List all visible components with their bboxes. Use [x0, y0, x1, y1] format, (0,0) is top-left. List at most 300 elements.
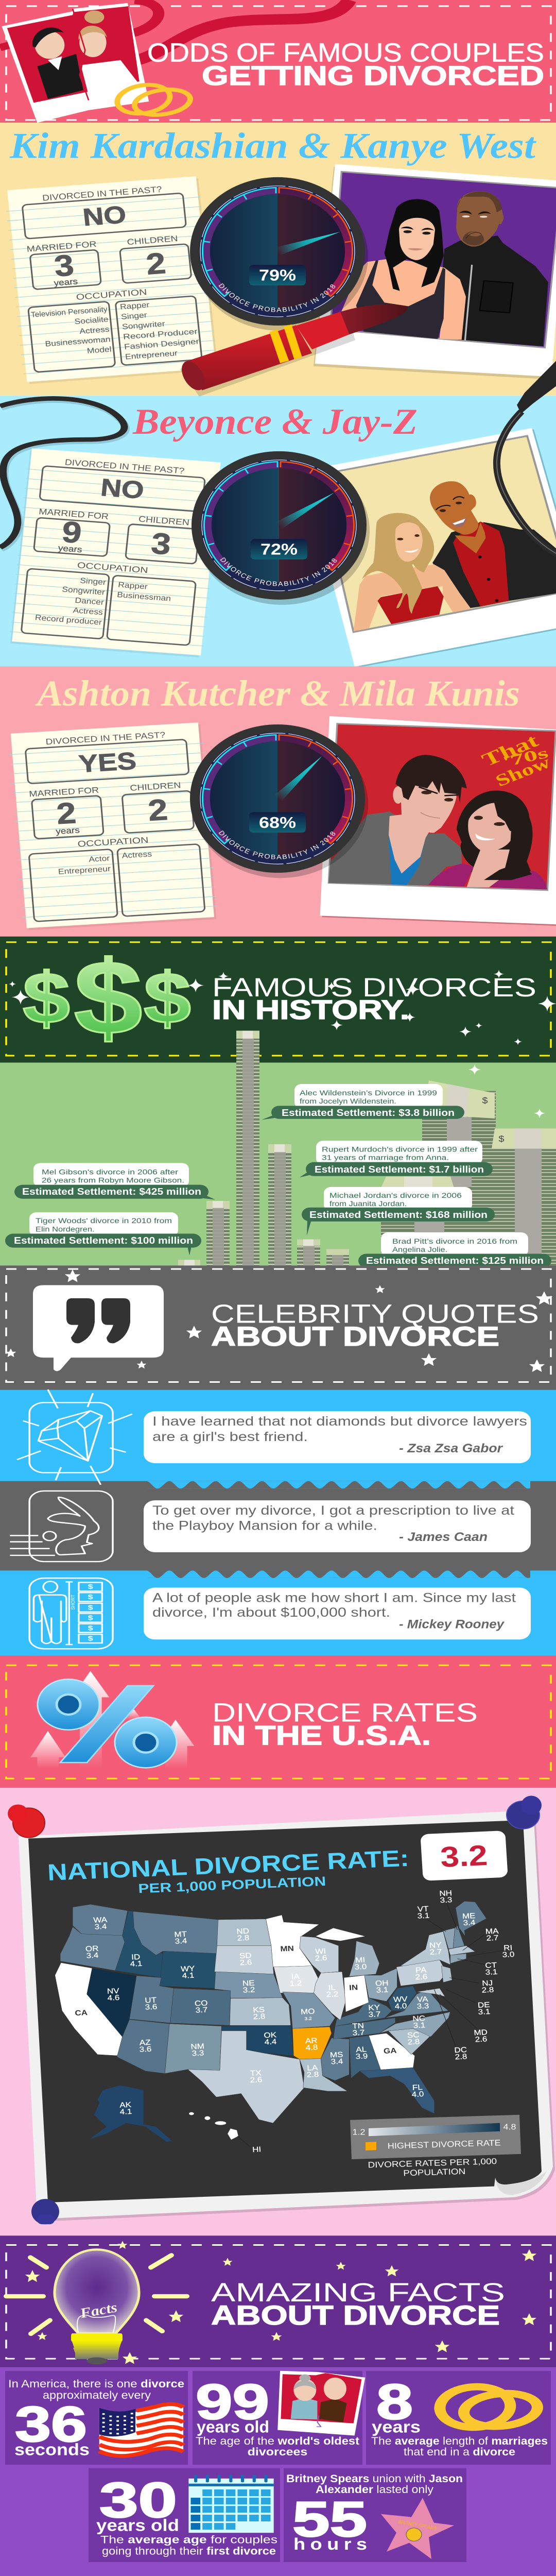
labels: state rates: 3.6: [139, 2045, 152, 2054]
bar: Michael Jordan tower: [297, 1240, 320, 1265]
labels: state rates: 2.6: [239, 1958, 252, 1967]
labels: state rates: AR: [305, 2037, 318, 2045]
callout: Brad Pitt: Angelina Jolie.: [392, 1246, 447, 1254]
labels: state rates: 3.4: [86, 1952, 99, 1960]
labels: state rates: NY: [429, 1941, 442, 1950]
fact panel: 36 seconds: 36: [15, 2396, 87, 2452]
list: Kanye occupations: Entrepreneur: [125, 349, 178, 361]
fact panel: 99 years old: years old: [197, 2418, 269, 2436]
list: Jay-Z occupations: Rapper: [118, 581, 148, 591]
bar: Michael Jordan big stack: [381, 1177, 493, 1265]
labels: state rates: PA: [415, 1966, 427, 1975]
labels: state rates: KS: [253, 2006, 265, 2014]
icon: gold rings: [432, 2382, 542, 2432]
labels: state rates: 3.1: [478, 2008, 491, 2016]
labels: state rates: 2.7: [429, 1948, 442, 1957]
label: divorced in the past: DIVORCED IN THE PAST?: [45, 730, 166, 747]
icon: stethoscope cable: [0, 398, 126, 549]
icon: bulb rays: [6, 2255, 187, 2334]
fact panel: 30 years old: The average age for couples: [100, 2533, 277, 2546]
section background: quote row grey: [0, 1481, 556, 1570]
section background: famous divorces header: [0, 937, 556, 1063]
paper: Kim and Kanye facts: [4, 176, 218, 384]
callout: Michael Jordan: [302, 1187, 495, 1235]
bar: Tiger Woods tower: [178, 1260, 200, 1265]
map: United States by divorce rate: [55, 1889, 515, 2154]
labels: state rates: 4.1: [130, 1960, 143, 1968]
icon: Hollywood star: BRITNEY SPEARS: [397, 2519, 437, 2532]
icon: dollar signs: $: [23, 958, 70, 1039]
subheading: per 1,000 population: PER 1,000 POPULATION: [138, 1874, 326, 1896]
bar: Rupert Murdoch tower: [268, 1144, 291, 1265]
fact panel: 30 years old: years old: [96, 2516, 179, 2535]
label: occupation: OCCUPATION: [77, 561, 148, 575]
title: ABOUT DIVORCE: [211, 1322, 499, 1352]
legend: HIGHEST DIVORCE RATE: [387, 2138, 501, 2150]
photo: Beyonce and Jay-Z polaroid: [303, 428, 556, 668]
labels: state rates: SD: [239, 1952, 252, 1960]
labels: state rates: 2.8: [306, 2071, 319, 2079]
callout: Rupert Murdoch: 31 years of marriage from Anna.: [322, 1154, 449, 1162]
value: 2 children: 2: [145, 247, 167, 281]
labels: state rates: 3.2: [304, 2016, 312, 2021]
icon: dollar signs: $: [144, 958, 191, 1039]
labels: state rates: 3.1: [485, 1968, 498, 1977]
label: occupation: OCCUPATION: [77, 835, 149, 849]
header panel: amazing facts: [6, 2241, 551, 2364]
labels: state rates: 3.9: [355, 2052, 368, 2061]
list: Kim occupations: Model: [86, 345, 112, 355]
labels: state rates: IL: [328, 1984, 336, 1992]
callout: Mel Gibson: 26 years from Robyn Moore Gibson.: [42, 1177, 184, 1184]
label: occupation: OCCUPATION: [76, 287, 147, 302]
fact panel: 55 hours: hours: [293, 2535, 367, 2553]
labels: state rates: 2.8: [407, 2038, 420, 2046]
labels: state rates: 3.4: [175, 1937, 187, 1945]
value: 9 years: 9: [60, 515, 83, 550]
icon: ribbon: [0, 0, 349, 62]
callout: Brad Pitt: Estimated Settlement: $125 million: [366, 1256, 544, 1266]
legend: POPULATION: [403, 2166, 466, 2178]
label: children: CHILDREN: [127, 233, 178, 247]
callout: Tiger Woods: Elin Nordegren.: [36, 1225, 95, 1233]
labels: state rates: [75, 1889, 515, 2154]
labels: state rates: NJ: [482, 1979, 493, 1988]
fact panel: 36 seconds: In America, there is one divorce: [8, 2378, 184, 2390]
gauge: 72 percent: 72%: [260, 541, 298, 558]
icon: red pin: [8, 1804, 45, 1838]
list: Kanye occupations: Fashion Designer: [124, 337, 200, 351]
quote card: James Caan: the Playboy Mansion for a while.: [152, 1518, 377, 1533]
bar: Mel Gibson tower: [206, 1201, 230, 1265]
callout: Rupert Murdoch: [300, 1141, 493, 1177]
value: 3 years: 3: [53, 249, 76, 283]
labels: state rates: IA: [291, 1973, 300, 1981]
icon: torn wedding photo: [2, 3, 149, 123]
legend: DIVORCE RATES PER 1,000: [368, 2156, 497, 2170]
text: That '70s Show logo: Show: [492, 753, 554, 790]
labels: state rates: 3.4: [94, 1923, 107, 1931]
section background: header pink: [0, 0, 556, 123]
gauge: 72 percent: [192, 451, 370, 605]
bar: Rupert Murdoch big stack: $: [498, 1133, 505, 1143]
quote card: James Caan: - James Caan: [399, 1531, 488, 1544]
labels: state rates: 4.0: [394, 2002, 407, 2011]
title: [212, 1698, 478, 1751]
section background: divorce rates header: [0, 1656, 556, 1788]
labels: state rates: 3.7: [352, 2029, 365, 2037]
text: That '70s Show logo: [478, 731, 554, 790]
gauge: 79 percent: [190, 177, 368, 331]
section background: Beyonce and Jay-Z blue: [0, 396, 556, 666]
labels: state rates: 3.1: [413, 2021, 426, 2030]
labels: state rates: TN: [352, 2022, 364, 2030]
labels: state rates: WI: [315, 1947, 326, 1956]
icon: stethoscope earpiece: [497, 361, 556, 554]
badge: 3.2 rate: [420, 1831, 508, 1881]
callout: Mel Gibson: Estimated Settlement: $425 million: [22, 1187, 201, 1197]
quote card: Mickey Rooney: divorce, I'm about $100,000 short.: [152, 1605, 390, 1620]
labels: state rates: AZ: [139, 2039, 151, 2047]
list: Beyonce occupations: [34, 573, 107, 626]
callout: Rupert Murdoch: Rupert Murdoch's divorce in 1999 after: [322, 1145, 478, 1154]
labels: state rates: DE: [477, 2001, 490, 2009]
value: no: NO: [99, 473, 145, 504]
callout: Mel Gibson: Mel Gibson's divorce in 2006 after: [42, 1168, 178, 1176]
legend: [350, 2115, 521, 2178]
icon: torn photo of elderly couple: [277, 2371, 365, 2435]
labels: state rates: WV: [393, 1995, 408, 2004]
legend: 1.2: [352, 2128, 366, 2137]
photo: Ashton and Mila polaroid: [320, 716, 556, 926]
icon: Hollywood star: [381, 2498, 454, 2559]
callout: Alec Wildenstein: [262, 1084, 464, 1120]
labels: state rates: NH: [439, 1889, 452, 1898]
labels: state rates: 4.6: [107, 1994, 120, 2003]
labels: state rates: WY: [181, 1965, 195, 1973]
fact panel: 36 seconds: [5, 2371, 188, 2465]
icon: bottom blue pin: [31, 2199, 59, 2224]
section background: settlements: [0, 1063, 556, 1266]
title: ABOUT DIVORCE: [211, 2300, 500, 2331]
labels: state rates: IN: [349, 1984, 358, 1992]
labels: state rates: UT: [145, 1996, 157, 2005]
gauge: 68 percent: [190, 724, 368, 878]
labels: state rates: HI: [252, 2145, 262, 2154]
labels: state rates: 4.0: [411, 2090, 424, 2099]
value: 2 years: 2: [55, 796, 77, 831]
icon: US flag: [99, 2404, 183, 2456]
bar: Alec Wildenstein big stack: $: [482, 1095, 488, 1105]
callout: Brad Pitt: Brad Pitt’s divorce in 2016 from: [392, 1238, 517, 1246]
labels: state rates: MS: [330, 2050, 343, 2059]
gauge: 68 percent: DIVORCE PROBABILITY IN 2018: [218, 831, 336, 859]
list: Kim occupations: Actress: [79, 325, 110, 336]
quote card: Mickey Rooney: A lot of people ask me how short I am. Since my last: [152, 1590, 516, 1605]
label: divorced in the past: DIVORCED IN THE PAST?: [42, 184, 163, 202]
fact panel: 55 hours: Britney Spears union with Jason: [286, 2472, 463, 2484]
list: Mila occupations: Actress: [121, 850, 152, 860]
text: That '70s Show logo: '70s: [500, 744, 550, 770]
quote card: Zsa Zsa Gabor: [144, 1411, 531, 1463]
list: Kanye occupations: Songwriter: [121, 319, 166, 331]
section background: facts light purple: [0, 2367, 556, 2576]
fact panel: 8 years: 8: [376, 2374, 413, 2430]
labels: state rates: 3.3: [192, 2049, 204, 2058]
bar: Brad Pitt tower: [326, 1249, 349, 1265]
callout: Tiger Woods: Tiger Woods' divorce in 2010 from: [36, 1217, 172, 1225]
fact panel: 99 years old: 99: [196, 2374, 269, 2430]
labels: state rates: MN: [280, 1945, 294, 1953]
value: 2 years: years: [56, 825, 80, 836]
labels: state rates: 3.4: [331, 2058, 343, 2066]
list: Kim occupations: [30, 305, 112, 359]
labels: state rates: WA: [93, 1916, 108, 1924]
icon: diamond: [17, 1389, 132, 1485]
labels: state rates: 3.3: [416, 2002, 429, 2011]
labels: state rates: 3.2: [242, 1986, 255, 1994]
labels: state rates: OK: [264, 2031, 276, 2040]
icon: dollar signs: [23, 940, 191, 1056]
title: IN THE U.S.A.: [212, 1721, 431, 1751]
header panel: famous divorces: [6, 940, 556, 1118]
heading: Beyonce and Jay-Z: Beyonce & Jay-Z: [132, 401, 418, 442]
section background: map pink: [0, 1788, 556, 2235]
photo: Kim and Kanye polaroid: [314, 164, 556, 379]
bar: Alec Wildenstein tower: [236, 1031, 259, 1265]
value: 9 years: years: [58, 543, 83, 554]
callout: Michael Jordan: Michael Jordan's divorce in 2006: [329, 1192, 462, 1200]
title: FAMOUS DIVORCES: [212, 973, 536, 1002]
labels: state rates: VA: [417, 1995, 428, 2004]
gauge: 79 percent: 79%: [259, 267, 296, 284]
icon: light bulb: [55, 2249, 139, 2364]
icon: calendar: [188, 2476, 274, 2533]
labels: state rates: NE: [242, 1979, 255, 1988]
labels: state rates: 3.7: [195, 2006, 208, 2014]
labels: state rates: NV: [107, 1987, 119, 1995]
labels: state rates: 2.8: [237, 1934, 250, 1942]
title: DIVORCE RATES: [212, 1698, 478, 1727]
callout: Tiger Woods: [5, 1212, 201, 1256]
fact panel: 99 years old: [193, 2371, 365, 2465]
labels: state rates: MI: [355, 1956, 366, 1964]
header panel: divorce rates: [6, 1665, 551, 1778]
labels: state rates: MA: [485, 1927, 499, 1936]
label: children: CHILDREN: [138, 514, 190, 527]
callout: Michael Jordan: from Juanita Jordan.: [329, 1200, 407, 1208]
labels: state rates: 3.0: [354, 1963, 367, 1971]
fact panel: 30 years old: 30: [99, 2472, 177, 2528]
icon: short man and money: $: [88, 1604, 93, 1612]
labels: state rates: DC: [454, 2046, 467, 2055]
list: Beyonce occupations: Record producer: [34, 613, 102, 626]
quote card: Zsa Zsa Gabor: - Zsa Zsa Gabor: [399, 1442, 503, 1455]
labels: state rates: AK: [119, 2101, 132, 2109]
callout: Alec Wildenstein: Alec Wildenstein’s Divorce in 1999: [300, 1089, 437, 1097]
fact panel: 8 years: that end in a divorce: [404, 2446, 515, 2458]
callout: Mel Gibson: [14, 1163, 215, 1199]
heading: Kim Kardashian and Kanye West: Kim Kardashian & Kanye West: [9, 126, 536, 166]
quote card: James Caan: [144, 1500, 531, 1552]
title: [211, 1299, 539, 1352]
heading: national divorce rate: NATIONAL DIVORCE RATE:: [47, 1846, 410, 1886]
list: Kanye occupations: [119, 297, 201, 361]
paper: Ashton and Mila facts: [8, 722, 218, 930]
list: Beyonce occupations: Singer: [80, 577, 107, 587]
list: Beyonce occupations: Dancer: [75, 596, 105, 607]
icon: light bulb: Facts: [78, 2300, 119, 2321]
header panel: [0, 0, 551, 123]
labels: state rates: 2.8: [481, 1986, 494, 1994]
fact panel: 36 seconds: approximately every: [43, 2389, 151, 2401]
labels: state rates: 4.1: [119, 2108, 132, 2116]
value: 3 years: years: [54, 277, 78, 287]
labels: state rates: FL: [412, 2083, 423, 2092]
fact panel: 55 hours: [284, 2468, 466, 2562]
icon: rabbit: [10, 1491, 113, 1562]
labels: state rates: 4.8: [305, 2043, 318, 2052]
fact panel: 8 years: The average length of marriages: [371, 2435, 548, 2447]
icon: blue pin: [507, 1796, 542, 1829]
labels: state rates: 2.6: [315, 1954, 327, 1962]
labels: state rates: 3.0: [502, 1951, 515, 1959]
chart: money stacks: [5, 1031, 556, 1268]
section background: Ashton and Mila pink: [0, 666, 556, 937]
icons: stars: [6, 1269, 552, 1372]
icon: dollar signs: $: [74, 940, 143, 1056]
list: Ashton occupations: Actor: [89, 854, 110, 864]
labels: state rates: MT: [174, 1930, 187, 1939]
list: Beyonce occupations: Songwriter: [62, 585, 106, 597]
quote card: Mickey Rooney: - Mickey Rooney: [399, 1618, 505, 1631]
list: Kim occupations: Businesswoman: [45, 335, 111, 348]
fact panel: 36 seconds: seconds: [14, 2441, 90, 2459]
labels: state rates: 3.7: [368, 2010, 381, 2019]
icons: stars: [25, 2241, 536, 2364]
gauge: 68 percent: 68%: [259, 814, 296, 832]
labels: state rates: 1.2: [289, 1979, 302, 1988]
fact panel: 8 years: years: [372, 2418, 421, 2436]
title: [211, 2278, 505, 2331]
labels: state rates: OR: [85, 1945, 99, 1953]
labels: state rates: LA: [307, 2064, 318, 2072]
callout: Alec Wildenstein: from Jocelyn Wildenstein.: [300, 1097, 396, 1106]
labels: state rates: 2.6: [415, 1973, 428, 1981]
badge: 3.2 rate: 3.2: [439, 1839, 489, 1873]
labels: state rates: 2.7: [486, 1934, 499, 1942]
labels: state rates: 3.6: [145, 2003, 158, 2011]
fact panel: 99 years old: The age of the world's oldest: [196, 2435, 359, 2447]
labels: state rates: NM: [190, 2042, 204, 2051]
list: Jay-Z occupations: [117, 581, 172, 603]
title: CELEBRITY QUOTES: [211, 1299, 539, 1328]
quote card: James Caan: To get over my divorce, I got a prescription to live at: [152, 1503, 514, 1518]
text: That '70s Show logo: That: [478, 731, 542, 771]
icon: short man and money: $: [88, 1615, 93, 1622]
fact panel: 30 years old: [89, 2468, 280, 2562]
labels: state rates: CA: [75, 2009, 88, 2018]
labels: state rates: 3.1: [376, 1986, 389, 1994]
title: GETTING DIVORCED: [202, 61, 544, 91]
labels: state rates: CT: [485, 1961, 497, 1970]
list: Kim occupations: Socialite: [74, 315, 109, 326]
section background: Kim and Kanye yellow: [0, 123, 556, 396]
icon: percent with arrows: [30, 1671, 194, 1768]
icon: quote bubble: [33, 1285, 164, 1371]
value: no: NO: [81, 200, 127, 231]
icon: short man and money: $: [88, 1583, 93, 1590]
quote card: Zsa Zsa Gabor: I have learned that not diamonds but divorce lawyers: [152, 1414, 527, 1429]
legend: 4.8: [503, 2123, 516, 2131]
label: divorced in the past: DIVORCED IN THE PAST?: [64, 457, 185, 476]
label: married for: MARRIED FOR: [39, 506, 109, 521]
title: [212, 973, 536, 1025]
title: IN HISTORY.: [212, 995, 409, 1025]
labels: state rates: AL: [356, 2045, 367, 2054]
icon: short man and money: $: [88, 1635, 93, 1642]
icon: short man and money: $: [88, 1594, 93, 1601]
icon: short man and money: $: [88, 1625, 93, 1632]
callout: Michael Jordan: Estimated Settlement: $168 million: [309, 1210, 488, 1221]
icon: lipstick: [177, 304, 408, 397]
labels: state rates: 2.8: [253, 2012, 266, 2021]
labels: state rates: MO: [301, 2008, 315, 2016]
quote card: Zsa Zsa Gabor: are a girl's best friend.: [152, 1429, 308, 1444]
labels: state rates: 3.1: [417, 1912, 430, 1920]
labels: state rates: 2.6: [475, 2035, 488, 2044]
header panel: celebrity quotes: [6, 1269, 552, 1382]
list: Kanye occupations: Rapper: [119, 300, 150, 311]
labels: state rates: ME: [462, 1912, 476, 1921]
list: Ashton occupations: Entrepreneur: [58, 865, 111, 876]
panel: national divorce rate poster: [8, 1796, 555, 2224]
label: married for: MARRIED FOR: [29, 785, 99, 799]
callout: Tiger Woods: Estimated Settlement: $100 million: [14, 1235, 193, 1246]
label: short: SHORT: [70, 1595, 76, 1610]
title: AMAZING FACTS: [211, 2278, 505, 2307]
labels: state rates: CO: [195, 1999, 208, 2008]
labels: state rates: 2.6: [250, 2076, 263, 2084]
bar: Rupert Murdoch big stack: [492, 1128, 556, 1265]
labels: state rates: 4.4: [264, 2038, 277, 2046]
labels: state rates: TX: [250, 2069, 262, 2078]
section background: quotes header grey: [0, 1265, 556, 1391]
value: 2 children: 2: [147, 793, 169, 827]
labels: state rates: 3.3: [440, 1896, 453, 1905]
bar: Alec Wildenstein big stack: [422, 1080, 496, 1187]
labels: state rates: GA: [384, 2047, 397, 2055]
labels: state rates: VT: [417, 1905, 429, 1913]
labels: state rates: 2.2: [326, 1990, 339, 1999]
section background: facts purple header: [0, 2235, 556, 2367]
labels: state rates: KY: [368, 2004, 380, 2012]
label: married for: MARRIED FOR: [26, 239, 97, 254]
list: Kim occupations: Television Personality: [30, 305, 108, 319]
labels: state rates: ID: [131, 1953, 141, 1961]
fact panel: 30 years old: going through their first divorce: [102, 2545, 276, 2557]
list: Kanye occupations: Singer: [120, 311, 148, 321]
icon: curled poster corner: [495, 2171, 547, 2195]
labels: state rates: SC: [407, 2031, 420, 2040]
gauge: 79 percent: DIVORCE PROBABILITY IN 2018: [218, 283, 336, 312]
labels: state rates: OH: [375, 1979, 389, 1988]
section background: quote rows blue: [0, 1390, 556, 1656]
list: Ashton occupations: [57, 854, 111, 876]
fact panel: 55 hours: Alexander lasted only: [316, 2483, 433, 2496]
quote card: Mickey Rooney: [144, 1587, 531, 1639]
labels: state rates: RI: [503, 1944, 513, 1952]
